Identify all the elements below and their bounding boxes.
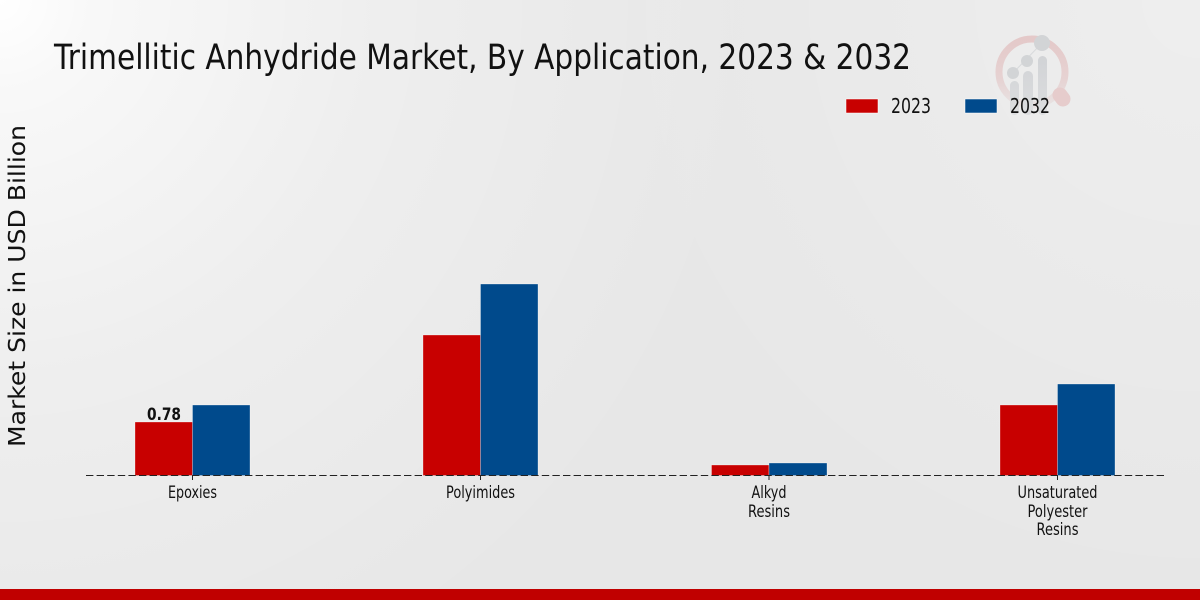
bars: Epoxies <box>135 405 250 476</box>
category label: Unsaturated Polyester Resins: Polyester <box>1028 502 1088 521</box>
category label: Unsaturated Polyester Resins <box>1018 483 1098 539</box>
legend: 2032: 2032 <box>1010 94 1050 118</box>
category label: Polyimides: Polyimides <box>446 483 515 502</box>
bar chart <box>86 284 1165 539</box>
category label: Unsaturated Polyester Resins: Unsaturated <box>1018 483 1098 502</box>
legend: 2032 <box>965 94 1050 118</box>
footer bar <box>0 589 1200 600</box>
legend <box>846 94 1050 118</box>
category label: Alkyd Resins <box>748 483 790 521</box>
legend: 2023: 2023 <box>891 94 931 118</box>
category label: Alkyd Resins: Alkyd <box>752 483 786 502</box>
data label: 0.78 <box>147 405 181 424</box>
category label: Alkyd Resins: Resins <box>748 502 790 521</box>
bars: Alkyd Resins <box>712 463 827 476</box>
title: Trimellitic Anhydride Market, By Application, 2023 & 2032 <box>53 38 911 78</box>
bars: Unsaturated Polyester Resins <box>1000 384 1115 476</box>
category label: Unsaturated Polyester Resins: Resins <box>1036 520 1078 539</box>
y axis label: Market Size in USD Billion <box>5 125 31 447</box>
bars: Polyimides <box>423 284 538 476</box>
legend: 2023 <box>846 94 931 118</box>
category label: Epoxies: Epoxies <box>168 483 217 502</box>
icon: watermark logo <box>999 35 1065 115</box>
